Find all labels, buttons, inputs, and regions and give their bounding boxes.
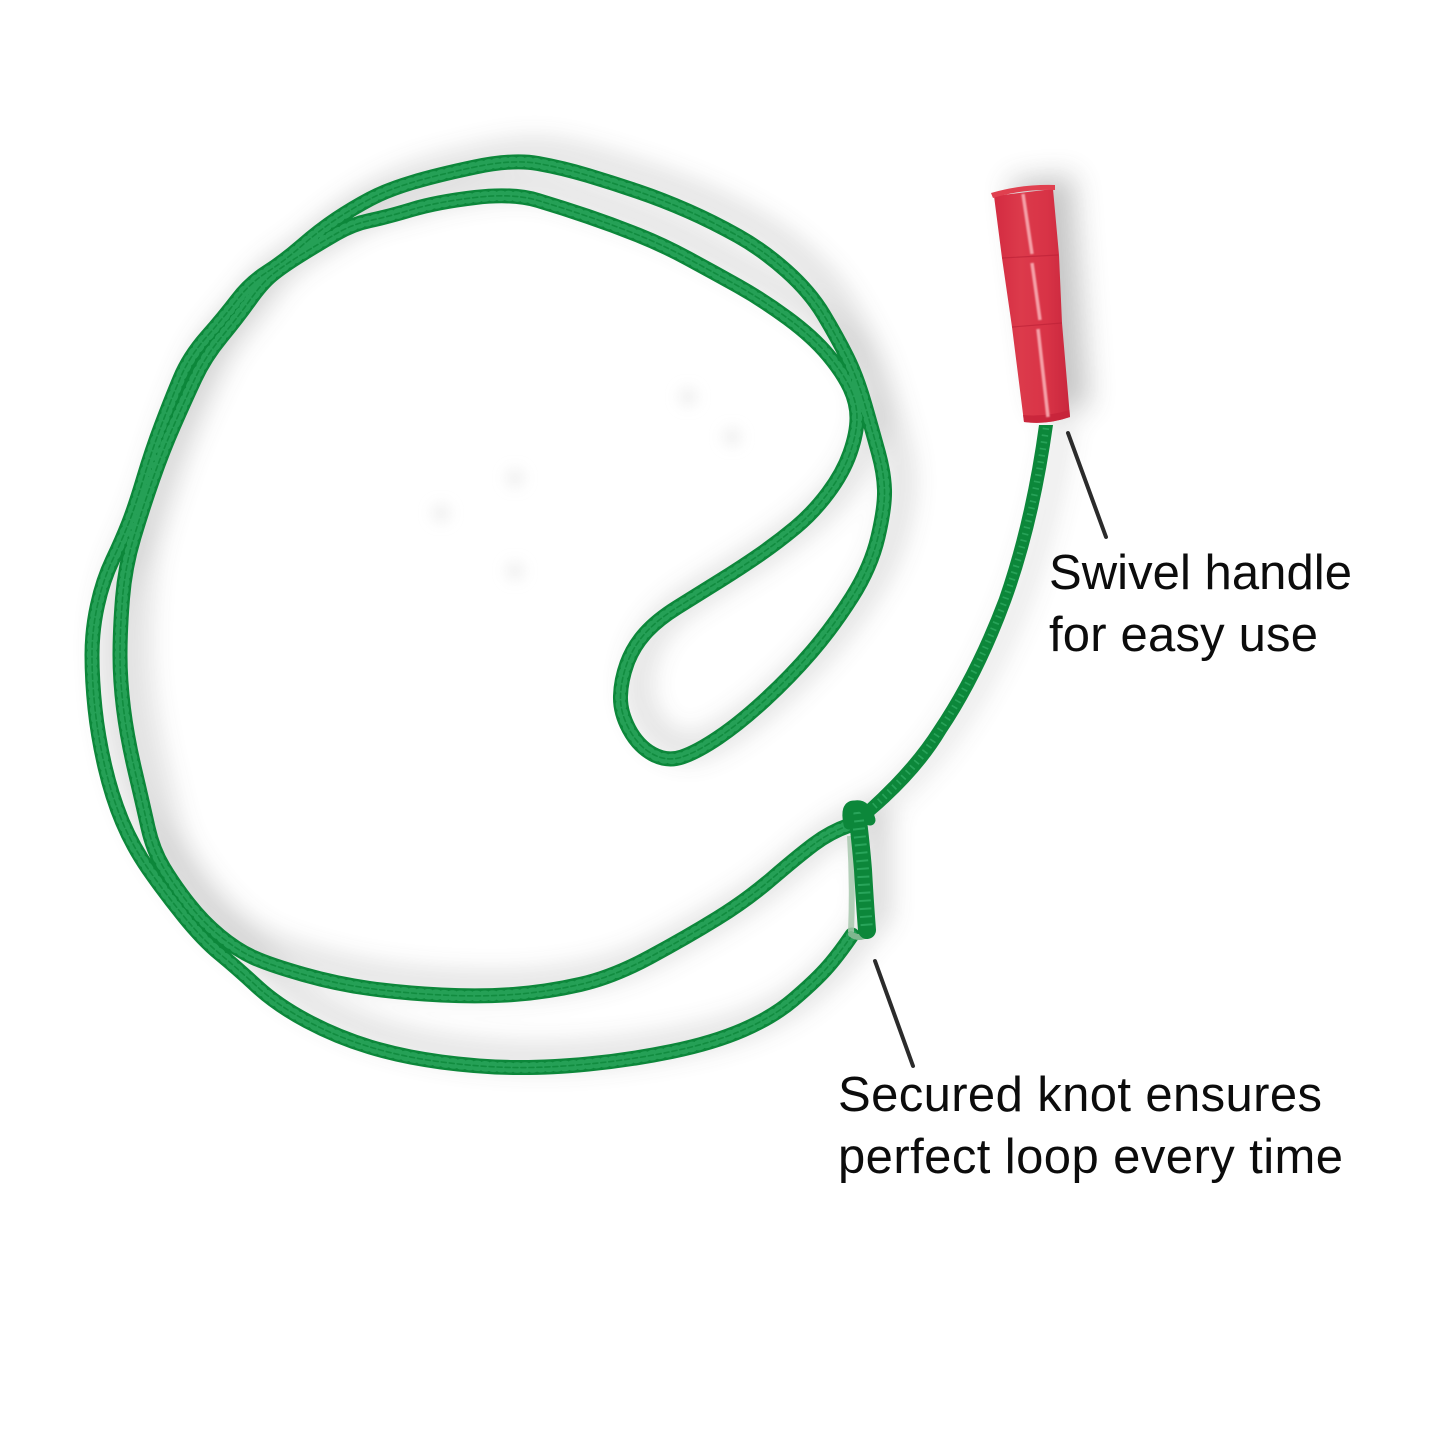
callout: swivel handle: Swivel handle — [1049, 546, 1352, 600]
leader line: knot — [875, 961, 913, 1066]
faint background smudges — [432, 388, 741, 580]
soft drop shadow behind product — [109, 151, 1089, 1057]
red swivel handle — [991, 185, 1070, 423]
leader line: handle — [1068, 433, 1106, 537]
callout: secured knot: perfect loop every time — [838, 1130, 1343, 1184]
handle grooves — [1002, 255, 1062, 327]
green rope loop — [92, 162, 885, 1068]
secured knot — [848, 806, 870, 937]
handle highlight — [1023, 194, 1048, 417]
callout: swivel handle: for easy use — [1049, 608, 1318, 662]
callout: secured knot: Secured knot ensures — [838, 1068, 1322, 1122]
thin tapered rope leading to handle — [866, 425, 1053, 815]
